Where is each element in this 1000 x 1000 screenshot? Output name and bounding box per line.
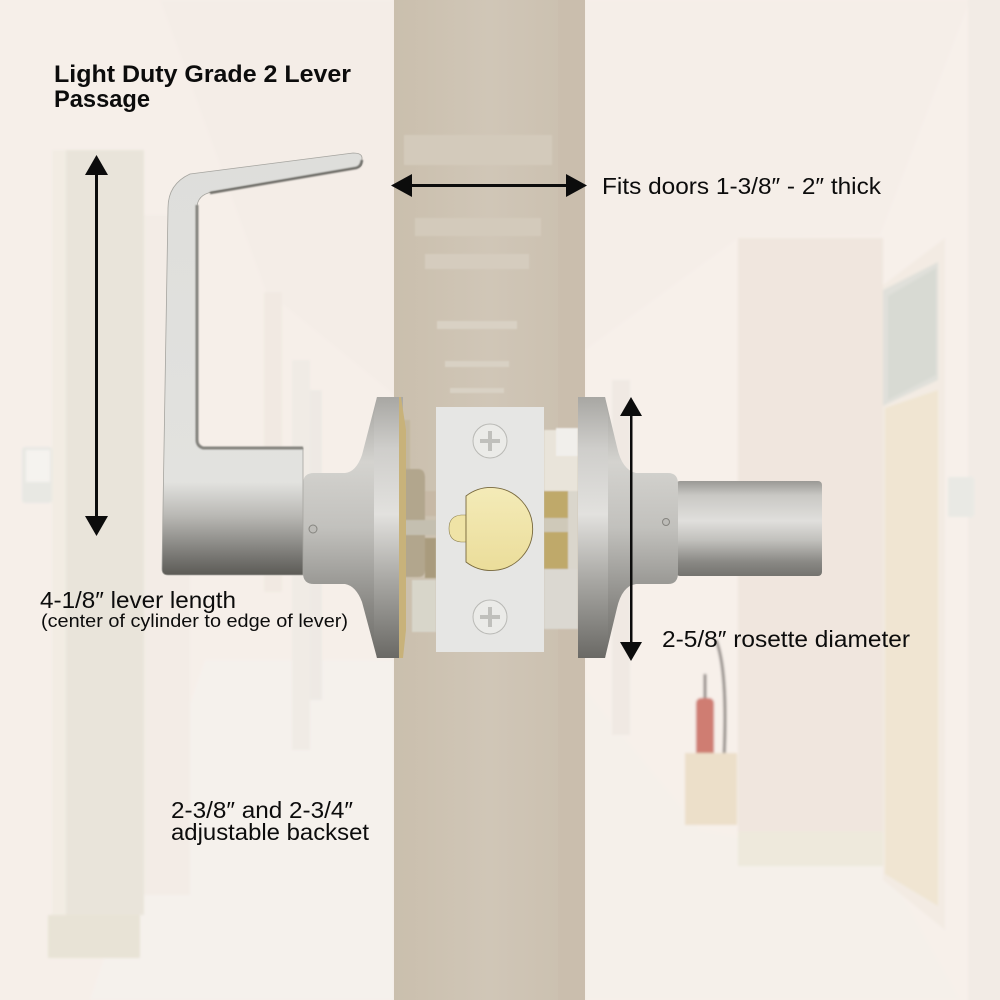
- arrow: rosette diameter: [620, 397, 642, 661]
- title: Light Duty Grade 2 Lever: [54, 61, 351, 88]
- label: lever length note: (center of cylinder to edge of lever): [41, 611, 348, 631]
- background: right corridor: [585, 0, 1000, 1000]
- label: rosette diameter: 2-5/8″ rosette diameter: [662, 626, 910, 652]
- icon: bottom screw: [473, 600, 507, 634]
- arrow: door thickness: [391, 174, 587, 197]
- right cylinder: [676, 481, 822, 576]
- right handle: rosette and cylinder: [578, 397, 822, 658]
- icon: top screw: [473, 424, 507, 458]
- background: left corridor: [0, 0, 394, 1000]
- brass latch: [449, 488, 533, 570]
- left handle: lever and rosette: [162, 153, 406, 658]
- arrow: lever height: [85, 155, 108, 536]
- lock mechanism: inner parts behind the plate: [400, 420, 578, 632]
- label: door thickness: Fits doors 1-3/8″ - 2″ thick: [602, 173, 882, 199]
- icon: fire extinguisher: [696, 640, 725, 758]
- strike plate with screws and latch: [436, 407, 544, 652]
- label: backset: 2-3/8″ and 2-3/4″: [171, 797, 353, 823]
- title line 2: Passage: [54, 86, 150, 113]
- lever: [162, 153, 362, 575]
- door edge: [394, 0, 585, 1000]
- left rosette and neck: [303, 397, 406, 658]
- label: lever length: 4-1/8″ lever length: [40, 587, 236, 613]
- label: backset line 2: adjustable backset: [171, 819, 370, 845]
